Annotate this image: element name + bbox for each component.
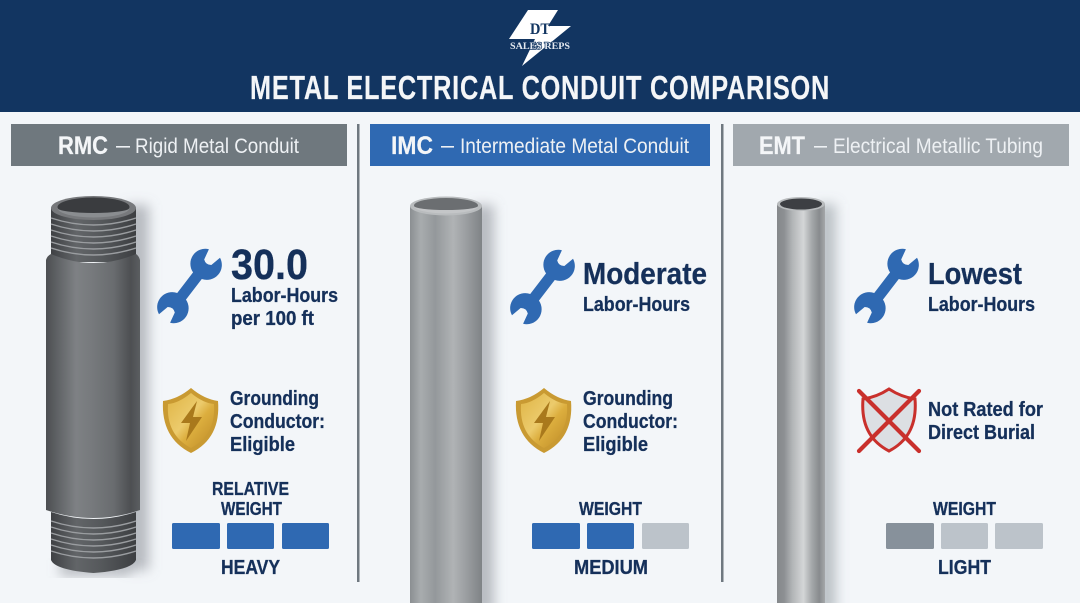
labor hours label: Labor-Hours: [583, 294, 690, 316]
heading: RMC: [11, 124, 347, 166]
weight meter: heavy: RELATIVE: [212, 479, 289, 499]
column dividers: [357, 124, 724, 582]
icon: wrench: [152, 244, 227, 328]
pipe: intermediate conduit: [410, 196, 494, 603]
grounding text: Conductor:: [230, 411, 325, 433]
heading: EMT: Electrical Metallic Tubing: [833, 135, 1043, 158]
icon: gold shield with bolt: [516, 388, 571, 453]
grounding text: [230, 388, 325, 456]
panel: RMC: [11, 124, 347, 579]
icon: crossed-out shield: [859, 389, 919, 451]
heading: IMC: IMC: [391, 132, 433, 160]
burial rating text: Not Rated for: [928, 399, 1043, 421]
weight meter: light: [886, 499, 1043, 579]
logo: DT Sales Reps lightning bolt: DT: [530, 21, 550, 38]
grounding text: [583, 388, 678, 456]
weight meter: heavy: HEAVY: [221, 557, 281, 579]
labor hours label: [928, 256, 1035, 316]
pipe: thin-wall tubing: [777, 197, 836, 603]
weight meter: heavy: [172, 479, 329, 579]
header band: [0, 0, 1080, 112]
icon: wrench: [849, 244, 924, 328]
heading: EMT: [733, 124, 1069, 166]
grounding text: Grounding: [583, 388, 673, 410]
pipe: threaded rigid conduit: [46, 196, 149, 576]
grounding text: Eligible: [230, 434, 295, 456]
panel: EMT: [733, 124, 1069, 603]
heading: IMC: [370, 124, 710, 166]
logo: DT Sales Reps lightning bolt: [509, 10, 571, 66]
labor hours stat: per 100 ft: [231, 308, 314, 330]
weight meter: medium: MEDIUM: [574, 557, 648, 579]
heading: RMC: RMC: [58, 132, 108, 160]
weight meter: medium: [532, 499, 689, 579]
labor hours stat: [231, 241, 338, 330]
grounding text: Conductor:: [583, 411, 678, 433]
grounding text: Grounding: [230, 388, 319, 410]
heading: IMC: Intermediate Metal Conduit: [460, 135, 689, 158]
burial rating text: [928, 399, 1043, 444]
weight meter: light: LIGHT: [938, 557, 991, 579]
weight meter: medium: WEIGHT: [579, 499, 642, 519]
labor hours label: Lowest: [928, 256, 1022, 291]
burial rating text: Direct Burial: [928, 422, 1035, 444]
grounding text: Eligible: [583, 434, 648, 456]
logo: DT Sales Reps lightning bolt: SALES REPS: [510, 42, 570, 52]
panel: IMC: [370, 124, 710, 603]
weight meter: light: WEIGHT: [933, 499, 996, 519]
title: METAL ELECTRICAL CONDUIT COMPARISON: [250, 69, 830, 106]
labor hours label: Moderate: [583, 256, 707, 291]
labor hours label: Labor-Hours: [928, 294, 1035, 316]
labor hours label: [583, 256, 707, 316]
weight meter: heavy: WEIGHT: [221, 499, 282, 519]
icon: wrench: [505, 245, 580, 329]
heading: RMC: Rigid Metal Conduit: [135, 135, 299, 158]
labor hours stat: 30.0: [231, 241, 308, 289]
icon: gold shield with bolt: [163, 388, 218, 453]
heading: EMT: EMT: [759, 132, 805, 160]
labor hours stat: Labor-Hours: [231, 285, 338, 307]
